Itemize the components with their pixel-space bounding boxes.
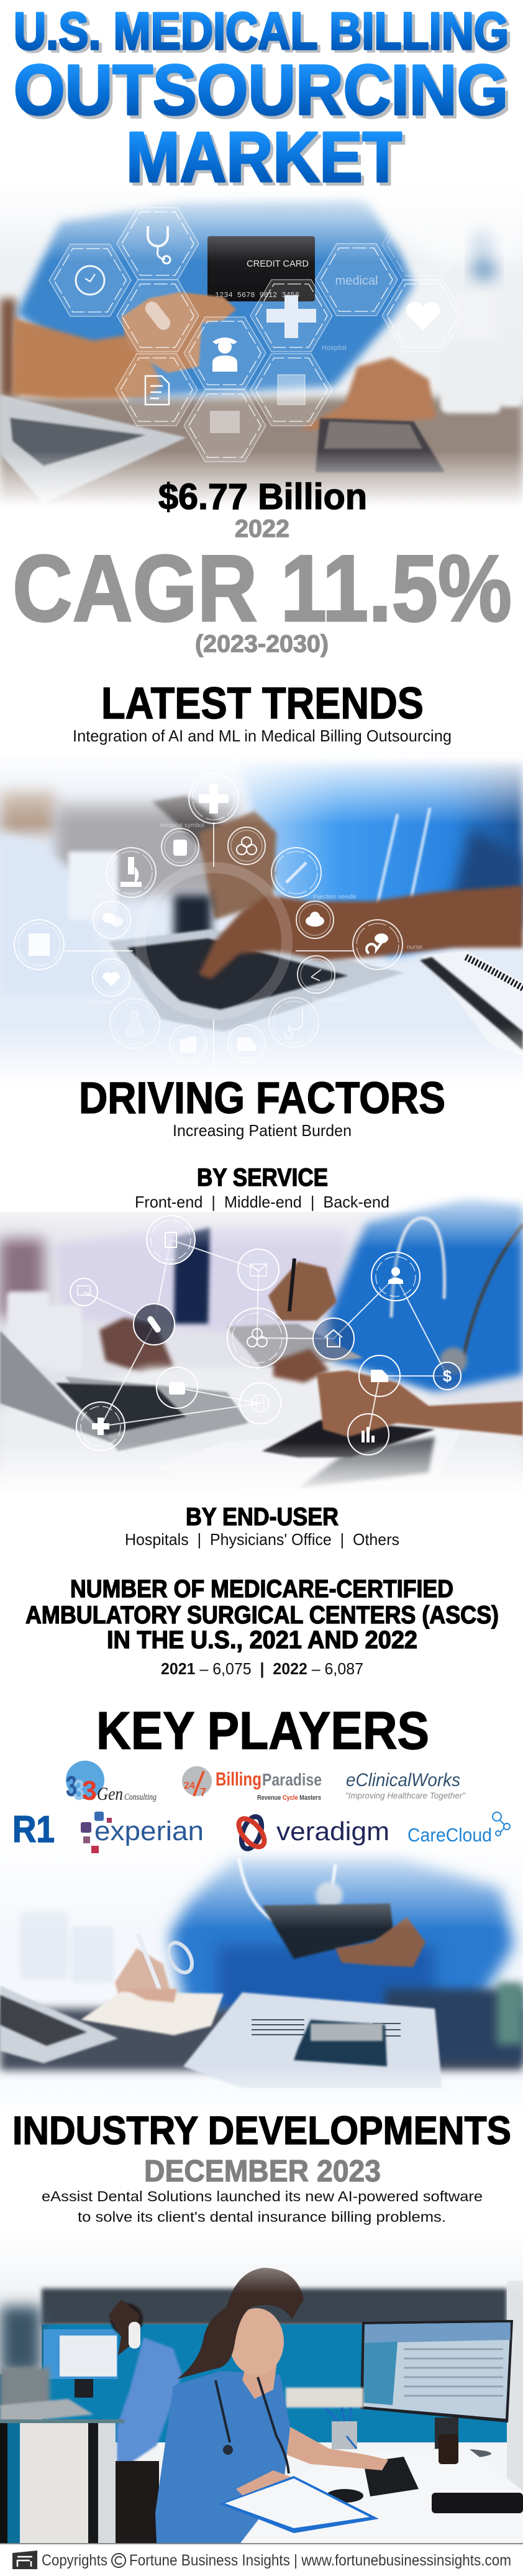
icon: medical label hexagon: medical <box>335 274 378 288</box>
icon: document node <box>147 1216 195 1264</box>
icon: cross circle <box>189 774 239 823</box>
end-user list: Hospitals | Physicians' Office | Others <box>125 1530 399 1549</box>
ASC numbers: 2021 – 6,075 | 2022 – 6,087 <box>161 1659 363 1678</box>
year: 2022 <box>235 515 289 543</box>
shelf behind <box>286 2388 363 2408</box>
left desk <box>0 2368 159 2543</box>
colleague <box>109 2299 182 2472</box>
bottles <box>7 1291 82 1370</box>
icon: chat circle <box>93 901 130 938</box>
bottles <box>0 833 112 994</box>
logo: eClinicalWorks: "Improving Healthcare Together" <box>345 1790 466 1800</box>
icon: syringe circle <box>271 848 321 897</box>
icon: cloud download circle <box>296 901 334 938</box>
copyright text: Copyrights <box>42 2552 107 2569</box>
icon: blood bag circle <box>161 828 199 866</box>
photo: medical billing hands with credit card <box>0 184 523 531</box>
icon: laptop node <box>70 1278 98 1306</box>
laptop <box>0 1986 118 2063</box>
clipboard <box>220 2476 379 2533</box>
fades <box>0 1836 523 1930</box>
logo: CareCloud <box>407 1812 510 1846</box>
photo: nurse working at computer <box>0 2228 523 2543</box>
logo: experian: experian <box>94 1816 204 1846</box>
logo: CareCloud: CareCloud <box>407 1824 492 1846</box>
credit card <box>207 236 315 301</box>
credit card: CREDIT CARD <box>247 259 309 269</box>
logo: 3Gen Consulting: 3 <box>66 1770 77 1802</box>
icon: ambulance circle <box>228 1025 265 1062</box>
icon: case node <box>157 1367 198 1408</box>
arm and hand <box>199 886 523 979</box>
icon: dollar node <box>434 1362 461 1390</box>
heading: medicare ASCs: IN THE U.S., 2021 AND 2022 <box>107 1626 417 1654</box>
icon: calculator hexagon <box>250 354 332 426</box>
bottles <box>20 1911 114 1982</box>
title <box>14 2 512 200</box>
icon: cross hexagon <box>250 280 332 352</box>
tablet <box>262 1904 394 1959</box>
calculator <box>262 1420 435 1457</box>
laptop <box>0 1331 248 1454</box>
fades <box>0 753 523 825</box>
laptop <box>0 395 186 503</box>
development text: eAssist Dental Solutions launched its new AI-powered software <box>42 2188 483 2204</box>
faint icon captions: Stethoscope <box>312 997 347 1004</box>
logo: veradigm <box>234 1814 389 1851</box>
paper stack <box>183 1992 442 2088</box>
heading: medicare ASCs <box>25 1575 499 1654</box>
icon: dollar node: $ <box>443 1367 452 1385</box>
tablet <box>227 1324 363 1367</box>
logo: BillingParadise <box>182 1766 322 1802</box>
logo: R1: R1 <box>12 1808 55 1850</box>
photo: nurse with tablet and desk <box>0 1836 523 2135</box>
development text: to solve its client's dental insurance billing problems. <box>78 2209 446 2225</box>
desk <box>0 1367 523 1492</box>
circular icons <box>14 774 402 1072</box>
forecast period: (2023-2030) <box>195 631 329 658</box>
icon: biohazard node <box>227 1308 287 1368</box>
mouse <box>326 2489 363 2503</box>
logo: 3Gen Consulting: Gen <box>97 1784 123 1804</box>
phone and hand <box>152 795 267 882</box>
woman <box>155 2268 388 2543</box>
hand on calculator <box>317 1370 523 1437</box>
icon: heart circle <box>93 959 130 996</box>
icon: FBI logo <box>12 2551 37 2569</box>
icon: bandage node <box>134 1304 175 1345</box>
logo: BillingParadise: Paradise <box>262 1770 322 1789</box>
icon: stethoscope circle <box>353 920 402 969</box>
stethoscope tubes <box>374 808 430 920</box>
logos <box>12 1761 510 1853</box>
hexagon icons <box>49 208 464 462</box>
writing hand and pen <box>268 1262 337 1321</box>
icon: nurse node <box>371 1252 420 1301</box>
icon: medical label hexagon <box>316 244 398 316</box>
trend text: Integration of AI and ML in Medical Billing Outsourcing <box>73 727 452 745</box>
network icons <box>70 1216 461 1455</box>
icon: cross node <box>76 1402 125 1451</box>
notebook <box>422 951 523 1057</box>
white bottles <box>440 292 523 413</box>
icon: laptop hexagon <box>184 390 266 462</box>
stethoscope <box>239 1858 335 1920</box>
logo: 3Gen Consulting: Consulting <box>124 1792 157 1802</box>
fades <box>0 1184 523 1249</box>
logo: eClinicalWorks: eClinicalWorks <box>346 1770 460 1790</box>
table <box>0 2009 523 2071</box>
icon: folder circle <box>170 1025 207 1063</box>
icon: copyright circle <box>112 2554 125 2567</box>
faint icon captions: Injection needle <box>313 894 357 901</box>
faint icon captions: Batteria <box>93 892 115 899</box>
heading: latest trends: LATEST TRENDS <box>101 679 424 728</box>
logo: 3Gen Consulting: 3 <box>82 1776 97 1806</box>
logo: BillingParadise: Billing <box>216 1768 262 1790</box>
faint icon captions: nurse <box>407 944 422 951</box>
doctor hand left <box>99 1318 174 1373</box>
photo: laptop typing with circular icons <box>0 753 523 1144</box>
calculator <box>316 418 445 472</box>
fades <box>0 2228 523 2293</box>
icon: empty hexagon <box>382 208 464 280</box>
arms <box>287 2427 388 2470</box>
hands <box>335 1917 425 1967</box>
calculator <box>294 2020 387 2066</box>
heading: by end-user: BY END-USER <box>186 1503 339 1531</box>
icon: share circle <box>298 956 335 993</box>
icon: flask circle <box>110 999 160 1048</box>
icon: home node <box>313 1318 354 1359</box>
pen holder <box>326 2408 357 2449</box>
development text <box>42 2188 483 2225</box>
desk <box>243 2447 523 2543</box>
logo: BillingParadise: 24 <box>184 1781 195 1791</box>
icon: doctor hexagon <box>184 317 266 389</box>
icon: biohazard circle <box>228 827 265 864</box>
faint icon captions: Test tube <box>87 999 112 1006</box>
photo: doctors with network icons <box>0 1184 523 1507</box>
heading: by service: BY SERVICE <box>197 1164 328 1191</box>
credit card: 1234 5678 9012 3456 <box>215 291 299 300</box>
faint icon captions <box>87 822 422 1006</box>
x-ray papers <box>157 1429 461 1492</box>
title line 3: MARKET <box>129 121 405 200</box>
heading: driving factors: DRIVING FACTORS <box>79 1074 445 1123</box>
icon: stethoscope hexagon <box>117 208 199 280</box>
icon: globe node <box>240 1383 281 1424</box>
title line 3: MARKET <box>126 118 402 197</box>
icon: microscope circle <box>106 848 156 897</box>
keyboard <box>363 2457 419 2496</box>
caption labels in photo: Hospital <box>322 344 347 352</box>
stethoscope <box>391 1218 445 1318</box>
logo: experian <box>81 1812 204 1853</box>
jar <box>439 2434 458 2464</box>
heading: medicare ASCs: NUMBER OF MEDICARE-CERTIFIED <box>70 1575 453 1603</box>
service list: Front-end | Middle-end | Back-end <box>135 1193 389 1211</box>
logo: BillingParadise: 7 <box>200 1786 206 1799</box>
icon: heart hexagon <box>382 280 464 352</box>
right monitor <box>360 2320 513 2459</box>
right hand at calculator <box>299 357 436 451</box>
icon: calculator circle <box>14 920 64 969</box>
icon: chart node <box>348 1414 389 1455</box>
left monitor <box>43 2329 118 2379</box>
logo: veradigm: veradigm <box>276 1817 389 1846</box>
nurse scrubs <box>329 1198 523 1392</box>
icon: document hexagon <box>116 354 198 426</box>
logo: 3Gen Consulting: 3 <box>73 1774 84 1806</box>
logo: eClinicalWorks <box>345 1770 466 1800</box>
icon: clock hexagon <box>49 244 131 316</box>
notebook <box>81 1992 224 2035</box>
logo: 3Gen Consulting <box>66 1761 157 1806</box>
fades <box>0 184 523 262</box>
bag <box>432 2493 523 2513</box>
development date: DECEMBER 2023 <box>144 2155 381 2188</box>
footer <box>0 2543 523 2576</box>
heading: key players: KEY PLAYERS <box>96 1702 429 1761</box>
market value: $6.77 Billion <box>158 477 367 517</box>
logo: BillingParadise: Revenue Cycle Masters <box>257 1794 321 1802</box>
left arm <box>12 318 161 399</box>
icon: mail node <box>238 1249 279 1290</box>
driver text: Increasing Patient Burden <box>173 1121 352 1140</box>
icon: stethoscope outline circle <box>269 997 319 1047</box>
icon: ambulance node <box>359 1355 400 1396</box>
faint icon captions: Hospital symbol <box>160 822 204 829</box>
hand holding card <box>121 292 236 373</box>
laptop <box>109 929 404 1032</box>
icon: bandage hexagon <box>117 280 199 352</box>
